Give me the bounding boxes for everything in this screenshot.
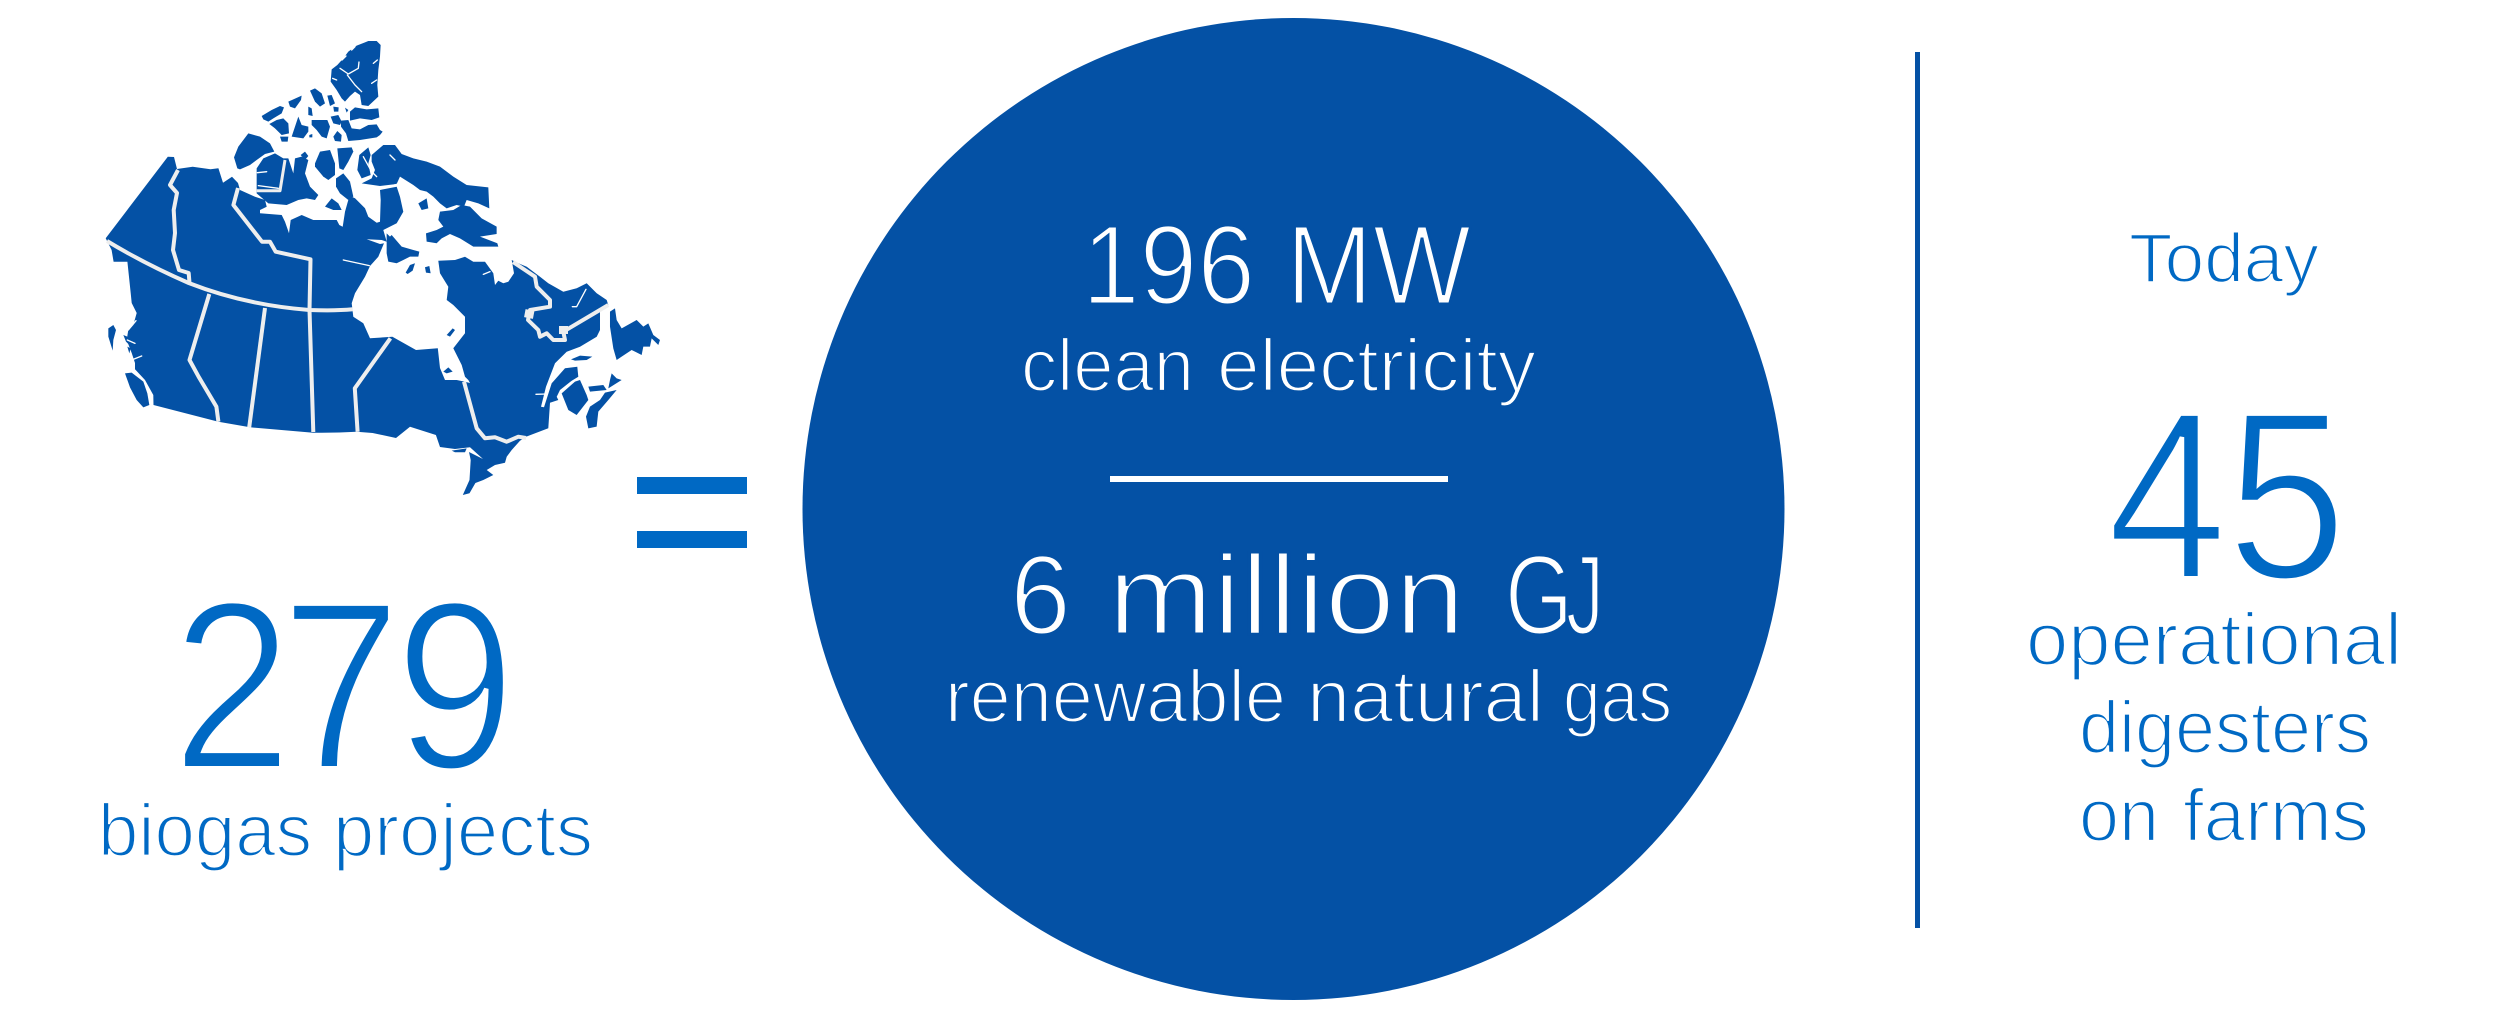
caption biogas projects: biogas bbox=[98, 789, 312, 872]
number 45: 45 bbox=[2107, 362, 2347, 630]
provincial and territorial borders bbox=[107, 160, 608, 442]
caption renewable natural gas: natural bbox=[1307, 655, 1544, 738]
caption renewable natural gas bbox=[945, 655, 1672, 738]
divider line bbox=[1110, 476, 1448, 482]
caption on farms: farms bbox=[2183, 774, 2369, 857]
Vancouver Island and Haida Gwaii bbox=[108, 321, 149, 407]
caption renewable natural gas: renewable bbox=[945, 655, 1286, 738]
icon: map of Canada with provincial borders bbox=[106, 41, 660, 495]
caption digesters: digesters bbox=[2079, 686, 2371, 769]
figure 6 million GJ: million bbox=[1108, 532, 1465, 658]
figure 6 million GJ: 6 bbox=[1010, 532, 1071, 658]
figure 196 MW: 196 bbox=[1082, 202, 1255, 328]
caption biogas projects: projects bbox=[333, 789, 593, 872]
caption operational: operational bbox=[2026, 598, 2402, 681]
figure 6 million GJ: J bbox=[1566, 532, 1604, 658]
vertical divider bbox=[1915, 52, 1920, 928]
stat: 279 biogas projects bbox=[98, 552, 593, 872]
mainland Canada bbox=[106, 157, 608, 495]
Atlantic islands and Hudson Bay islets bbox=[443, 272, 660, 452]
equals sign bbox=[637, 477, 747, 548]
figure 196 MW bbox=[1082, 202, 1471, 328]
caption on farms bbox=[2079, 774, 2369, 857]
stat: today 45 operational digesters on farms bbox=[2026, 219, 2402, 857]
figure 6 million GJ bbox=[1010, 532, 1604, 658]
panel: central circle with energy figures bbox=[802, 18, 1784, 1000]
caption clean electricity bbox=[1021, 324, 1536, 407]
figure 6 million GJ: G bbox=[1505, 532, 1573, 658]
caption biogas projects bbox=[98, 789, 593, 872]
caption clean electricity: electricity bbox=[1217, 324, 1536, 407]
number 279: 279 bbox=[172, 552, 515, 820]
Arctic islands bbox=[234, 41, 498, 274]
heading Today: Today bbox=[2129, 219, 2319, 297]
caption renewable natural gas: gas bbox=[1563, 655, 1672, 738]
caption clean electricity: clean bbox=[1021, 324, 1194, 407]
caption on farms: on bbox=[2079, 774, 2159, 857]
figure 196 MW: MW bbox=[1286, 202, 1471, 328]
